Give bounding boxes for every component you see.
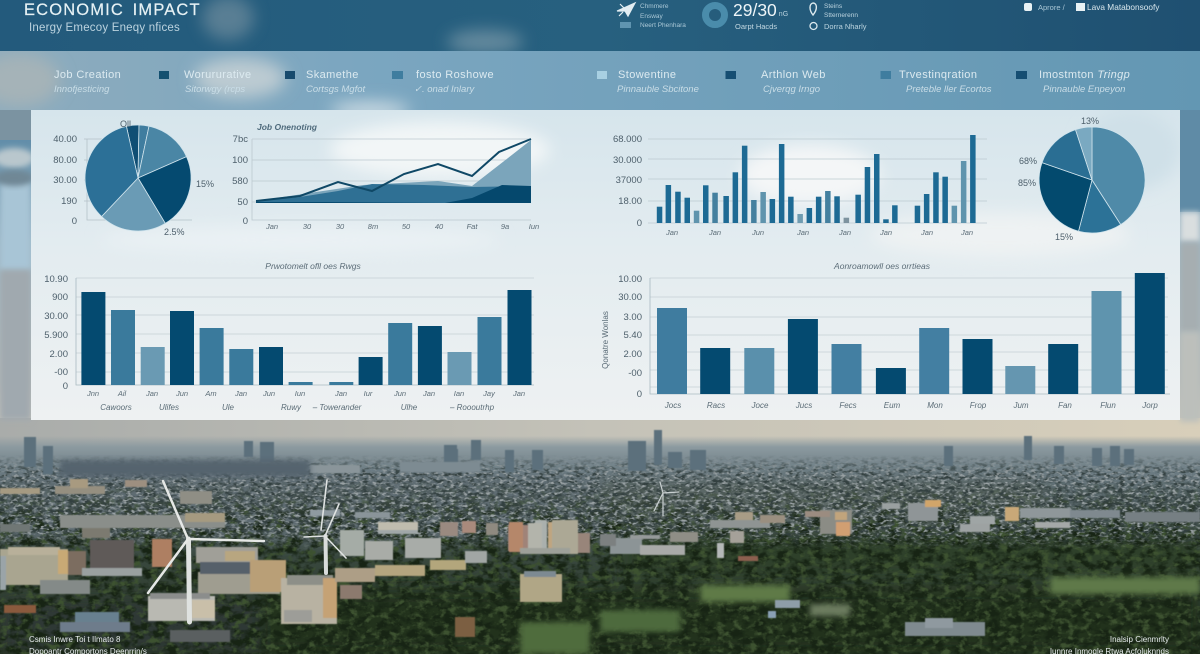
y axis labels: 0 xyxy=(637,389,642,400)
x axis labels: Jocs xyxy=(664,401,681,410)
x axis labels: Joce xyxy=(751,401,769,410)
y axis labels: 30.000 xyxy=(613,155,642,166)
grid and axes xyxy=(76,278,534,385)
pie labels: 85% xyxy=(1018,178,1036,188)
legend labels: Worururative xyxy=(184,69,252,81)
y axis labels: 0 xyxy=(63,381,68,392)
x axis labels: Jan xyxy=(422,389,435,398)
x axis labels: 9a xyxy=(501,222,509,231)
x axis labels: 50 xyxy=(402,222,411,231)
x axis labels: Am xyxy=(204,389,217,398)
wind turbines xyxy=(148,480,679,622)
stat labels: left: Neert Phenhara xyxy=(640,22,686,29)
title: Inergy Emecoy Eneqy nfices xyxy=(29,22,180,34)
area and line chart xyxy=(232,122,539,231)
bars xyxy=(81,290,532,385)
y axis labels: 37000 xyxy=(616,175,642,186)
grid and axes xyxy=(650,278,1170,394)
icon: badge xyxy=(1024,3,1032,11)
legend sublabels: Innofjesticing xyxy=(54,84,110,95)
x axis labels: Jun xyxy=(393,389,406,398)
category labels: Ulhe xyxy=(401,403,418,412)
legend sublabels: Cjverqg Irngo xyxy=(763,84,820,95)
x axis labels: Jan xyxy=(334,389,347,398)
y axis labels xyxy=(613,134,642,229)
x axis labels: Flun xyxy=(1100,401,1116,410)
category labels: – Roooutrhp xyxy=(449,403,495,412)
y axis labels: -00 xyxy=(628,368,642,379)
area: light xyxy=(256,140,531,203)
legend labels: Skamethe xyxy=(306,69,359,81)
axis with labels: 30.00 xyxy=(53,175,77,186)
x axis labels xyxy=(664,401,1158,410)
stat labels: right: Steins xyxy=(824,3,843,10)
y axis labels: 7bc xyxy=(233,134,248,145)
legend labels: fosto Roshowe xyxy=(416,69,494,81)
x axis labels: Jan xyxy=(838,228,851,237)
category labels: Ule xyxy=(222,403,235,412)
stat labels: left: Chmmere xyxy=(640,3,669,10)
pie labels: 15% xyxy=(196,179,214,189)
footer caption: right xyxy=(1050,635,1169,654)
grid and axes xyxy=(252,139,531,220)
x axis labels: Jan xyxy=(665,228,678,237)
x axis labels: Jun xyxy=(262,389,275,398)
x axis labels: Jorp xyxy=(1141,401,1158,410)
area: mid xyxy=(256,184,531,203)
stat caption: Oarpt Hacds xyxy=(735,22,777,31)
icon: ring xyxy=(706,6,724,24)
legend sublabels xyxy=(54,84,1125,95)
x axis labels: Fecs xyxy=(839,401,857,410)
stat value: 29/30 nG xyxy=(733,0,788,20)
pie slices xyxy=(1039,127,1145,233)
legend labels: Arthlon Web xyxy=(761,69,826,81)
x axis labels: Fan xyxy=(1058,401,1072,410)
stat labels: left xyxy=(640,3,686,29)
category labels: Ulifes xyxy=(159,403,179,412)
stat labels: right: Stternerenn xyxy=(824,12,858,19)
x axis labels: Jan xyxy=(145,389,158,398)
footer caption: left: Csmis Inwre Toi t Ilmato 8 xyxy=(29,635,121,644)
icon: plane xyxy=(617,3,635,16)
y axis labels: 2.00 xyxy=(624,349,642,360)
legend sublabels: Sitorwgy (rcps xyxy=(185,84,245,95)
y axis labels: 50 xyxy=(237,197,248,208)
x axis labels: Mon xyxy=(927,401,943,410)
y axis labels: 0 xyxy=(243,216,248,227)
stat labels: right: Dorra Nharly xyxy=(824,22,867,31)
y axis labels: 5.900 xyxy=(44,330,68,341)
x axis labels: Ail xyxy=(117,389,126,398)
x axis labels: Jun xyxy=(751,228,764,237)
bar chart: bottom left xyxy=(44,261,534,412)
x axis labels: Eum xyxy=(884,401,901,410)
y axis labels: -00 xyxy=(54,367,68,378)
line series xyxy=(256,139,531,201)
y axis labels: 900 xyxy=(52,292,68,303)
x axis labels: Jnn xyxy=(86,389,99,398)
x axis labels: Frop xyxy=(970,401,987,410)
y axis labels: 18.00 xyxy=(618,196,642,207)
x axis labels: 30 xyxy=(336,222,345,231)
x axis labels: Fat xyxy=(467,222,478,231)
icon: pin xyxy=(810,3,816,15)
legend labels: Imostmton Tringp xyxy=(1039,69,1130,81)
y axis labels xyxy=(44,274,68,392)
x axis labels: Iun xyxy=(529,222,539,231)
y axis labels: 2.00 xyxy=(50,349,68,360)
y axis labels: 30.00 xyxy=(44,311,68,322)
title: ECONOMIC IMPACT xyxy=(24,1,201,19)
category labels: Cawoors xyxy=(100,403,132,412)
stat labels: left: Ensway xyxy=(640,13,664,20)
header stats xyxy=(617,0,867,31)
pie labels: 2.5% xyxy=(164,227,185,237)
legend labels: Trvestinqration xyxy=(899,69,977,81)
axis with labels: 40.00 xyxy=(53,134,77,145)
x axis labels: Iur xyxy=(364,389,373,398)
x axis labels: Jun xyxy=(175,389,188,398)
category labels: – Towerander xyxy=(312,403,362,412)
footer caption: right: Inalsip Cienmrlty xyxy=(1110,635,1169,644)
grid and axes xyxy=(648,139,987,223)
y axis labels: 580 xyxy=(232,176,248,187)
bars xyxy=(657,273,1165,394)
area: dark xyxy=(256,185,531,203)
axis with labels xyxy=(53,134,192,227)
main chart panel xyxy=(31,110,1180,420)
category labels: Ruwy xyxy=(281,403,302,412)
x axis labels: 8m xyxy=(368,222,378,231)
y axis labels: 30.00 xyxy=(618,292,642,303)
x axis labels: Jan xyxy=(708,228,721,237)
x axis labels: 30 xyxy=(303,222,312,231)
x axis labels: Jucs xyxy=(795,401,812,410)
chart title: Aonroamowll oes orrtieas xyxy=(833,261,931,271)
legend swatches xyxy=(159,71,1027,79)
y axis labels: 10.90 xyxy=(44,274,68,285)
pie labels: 68% xyxy=(1019,156,1037,166)
icon: clock xyxy=(810,22,817,30)
legend labels xyxy=(54,69,1130,81)
pie chart: left xyxy=(53,119,214,237)
header bar xyxy=(0,0,1200,54)
title xyxy=(24,1,201,34)
y axis labels: 3.00 xyxy=(624,312,642,323)
sky background xyxy=(0,0,1200,452)
pie labels xyxy=(120,119,214,237)
pie labels: 15% xyxy=(1055,232,1073,242)
x axis labels xyxy=(86,389,525,398)
pie slices xyxy=(85,125,191,231)
legend sublabels: Preteble ller Ecortos xyxy=(906,84,992,95)
column chart: top right xyxy=(613,134,987,237)
link text one: Aprore / xyxy=(1038,3,1066,12)
x axis labels: 40 xyxy=(435,222,444,231)
axis with labels: 80.00 xyxy=(53,155,77,166)
x axis labels: Racs xyxy=(707,401,725,410)
x axis labels: Jan xyxy=(265,222,278,231)
pie labels xyxy=(1018,116,1099,242)
mid buildings xyxy=(0,549,68,585)
y axis labels: 0 xyxy=(637,218,642,229)
icon: square xyxy=(1076,3,1085,11)
city skyline and landscape photo xyxy=(0,430,1200,654)
chart title: Prwotomelt ofll oes Rwgs xyxy=(265,261,361,271)
y axis labels xyxy=(232,134,248,227)
legend labels: Stowentine xyxy=(618,69,676,81)
footer caption: left xyxy=(29,635,147,654)
axis with labels: 190 xyxy=(61,196,77,207)
y axis labels: 5.40 xyxy=(624,330,642,341)
legend sublabels: Pinnauble Sbcitone xyxy=(617,84,699,95)
x axis labels: Jan xyxy=(960,228,973,237)
x axis labels: Jan xyxy=(796,228,809,237)
park side buildings xyxy=(640,545,684,555)
legend band xyxy=(0,51,1200,110)
link text two: Lava Matabonsoofy xyxy=(1087,2,1160,12)
x axis labels xyxy=(665,228,973,237)
bars xyxy=(657,135,976,223)
x axis labels: Jan xyxy=(879,228,892,237)
far warm rows xyxy=(0,488,40,494)
x axis labels xyxy=(265,222,539,231)
legend sublabels: Pinnauble Enpeyon xyxy=(1043,84,1125,95)
y axis labels: 10.00 xyxy=(618,274,642,285)
x axis labels: Iun xyxy=(295,389,305,398)
x axis labels: Jan xyxy=(512,389,525,398)
chart title: Job Onenoting xyxy=(257,122,318,132)
y axis title: Qonatre Wonlas xyxy=(601,311,610,369)
legend sublabels: Cortsgs Mgfot xyxy=(306,84,365,95)
y axis labels: 68.000 xyxy=(613,134,642,145)
x axis labels: Jan xyxy=(234,389,247,398)
bar chart: bottom right xyxy=(601,261,1170,410)
y axis labels xyxy=(618,274,642,400)
x axis labels: Jan xyxy=(920,228,933,237)
header links xyxy=(1024,2,1160,12)
legend labels: Job Creation xyxy=(54,69,121,81)
y axis labels: 100 xyxy=(232,155,248,166)
category labels xyxy=(100,403,495,412)
x axis labels: Jum xyxy=(1012,401,1029,410)
pie labels: 13% xyxy=(1081,116,1099,126)
swatch xyxy=(620,22,631,28)
x axis labels: Jay xyxy=(482,389,496,398)
x axis labels: Ian xyxy=(454,389,464,398)
pie chart: right xyxy=(1018,116,1145,242)
axis with labels: 0 xyxy=(72,216,77,227)
stat labels: right xyxy=(824,3,867,31)
legend sublabels: ✓. onad Inlary xyxy=(414,84,475,95)
pie labels: Oll xyxy=(120,119,131,129)
